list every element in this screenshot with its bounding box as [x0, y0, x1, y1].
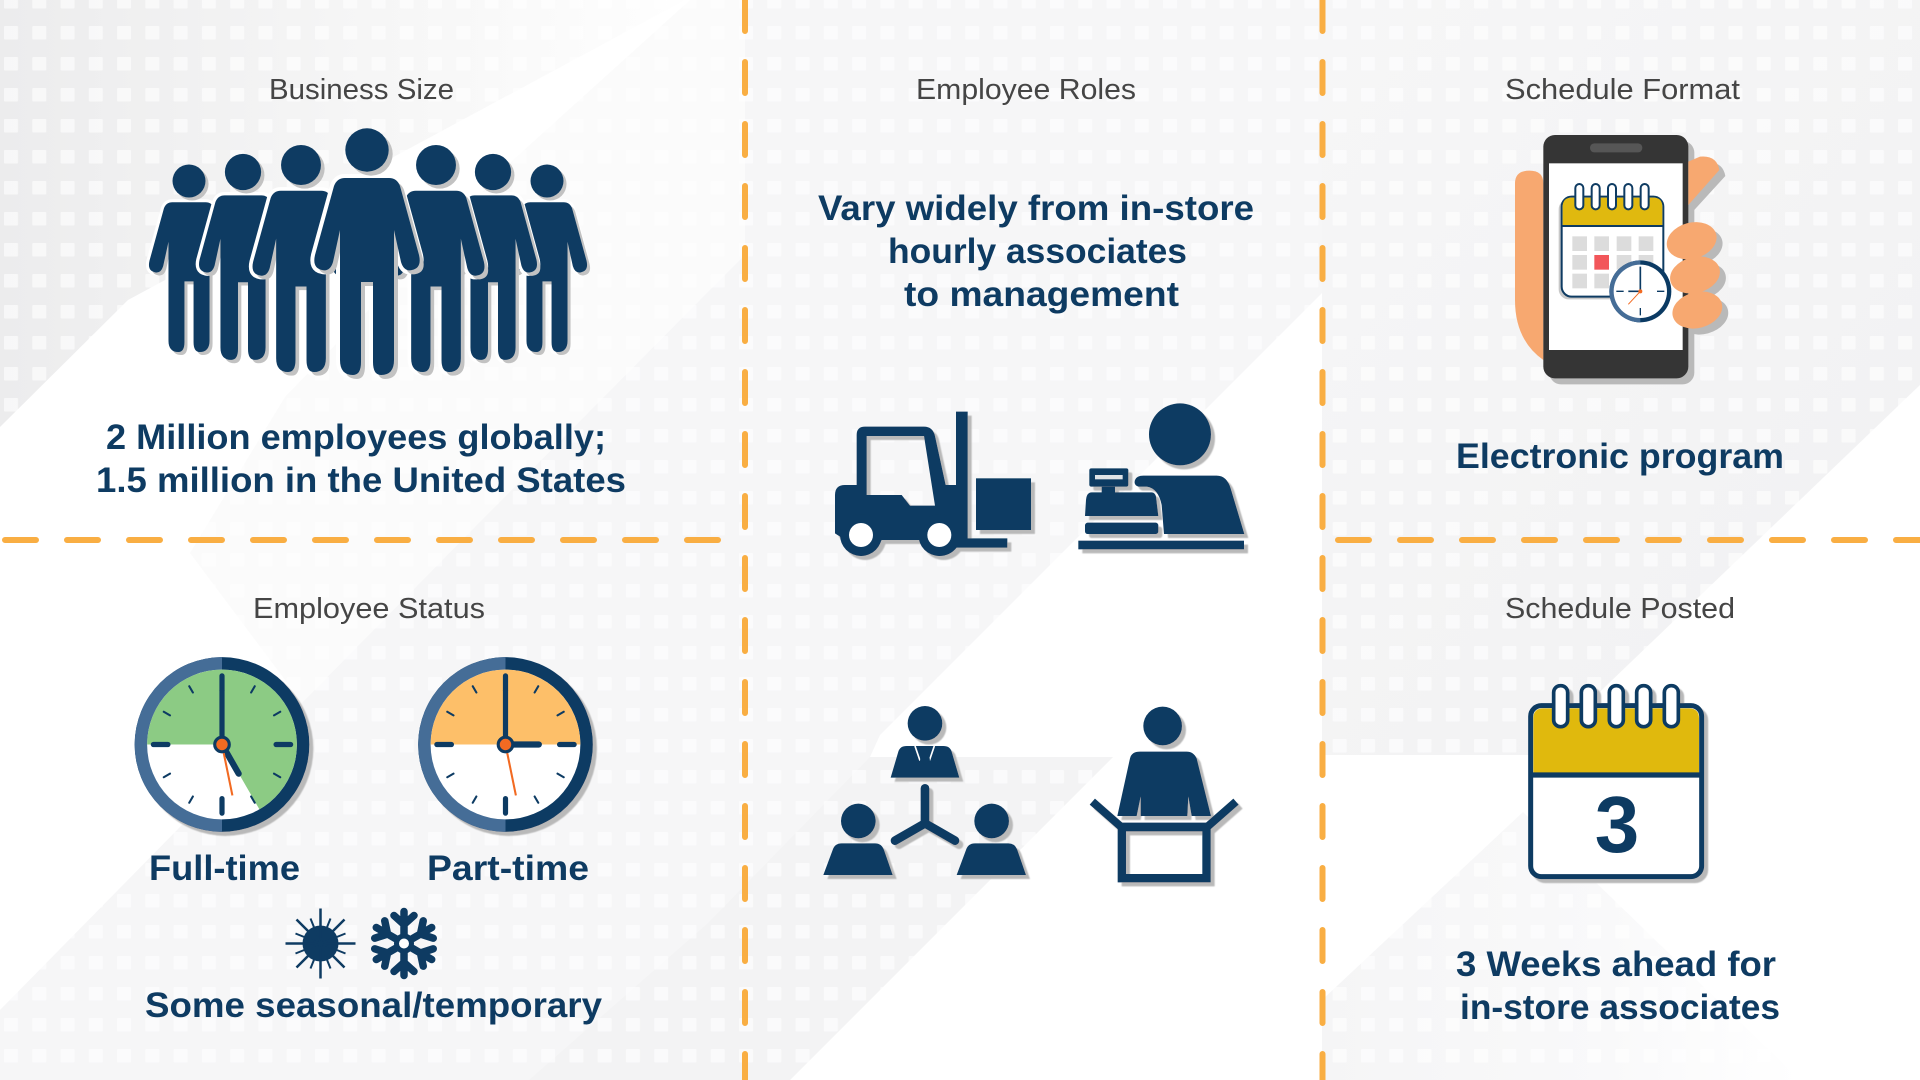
heading: schedule format: Schedule Format: [1505, 74, 1740, 106]
panel: employee roles: [818, 74, 1254, 882]
icon: cashier: [1078, 403, 1244, 549]
panel: employee status: [135, 593, 603, 1025]
heading: schedule posted: Schedule Posted: [1505, 593, 1735, 625]
heading: business size: Business Size: [269, 74, 454, 106]
label: electronic program: Electronic program: [1456, 437, 1784, 476]
icon: group of people: [149, 128, 590, 379]
icon: sun: [286, 908, 356, 978]
icon: calendar with number 3: [1531, 686, 1702, 877]
panel: schedule posted: [1456, 593, 1780, 1027]
icon: calendar with number 3: 3: [1595, 780, 1639, 869]
panel: schedule format: [1456, 74, 1784, 476]
icon: part-time clock: [418, 657, 593, 832]
text: employee count: [96, 418, 626, 500]
text: roles description: to management: [904, 275, 1179, 314]
heading: employee roles: Employee Roles: [916, 74, 1136, 106]
icon: forklift: [835, 412, 1031, 556]
text: roles description: Vary widely from in-store: [818, 189, 1254, 228]
label: part-time: Part-time: [427, 849, 589, 888]
text: employee count: 2 Million employees globally;: [106, 418, 606, 457]
icon: hand holding phone with calendar: [1515, 135, 1732, 384]
icon: snowflake: [371, 912, 437, 976]
label: seasonal/temporary: Some seasonal/temporary: [145, 986, 603, 1025]
text: employee count: 1.5 million in the United States: [96, 461, 626, 500]
text: three weeks ahead: in-store associates: [1460, 988, 1780, 1027]
icon: person unpacking box: [1092, 707, 1236, 882]
text: roles description: [818, 189, 1254, 314]
text: roles description: hourly associates: [888, 232, 1187, 271]
text: three weeks ahead: 3 Weeks ahead for: [1456, 945, 1776, 984]
panel: business size: [96, 74, 626, 500]
icon: full-time clock: [135, 657, 309, 832]
label: full-time: Full-time: [149, 849, 300, 888]
text: three weeks ahead: [1456, 945, 1780, 1027]
heading: employee status: Employee Status: [253, 593, 485, 625]
icon: management team: [823, 706, 1026, 875]
